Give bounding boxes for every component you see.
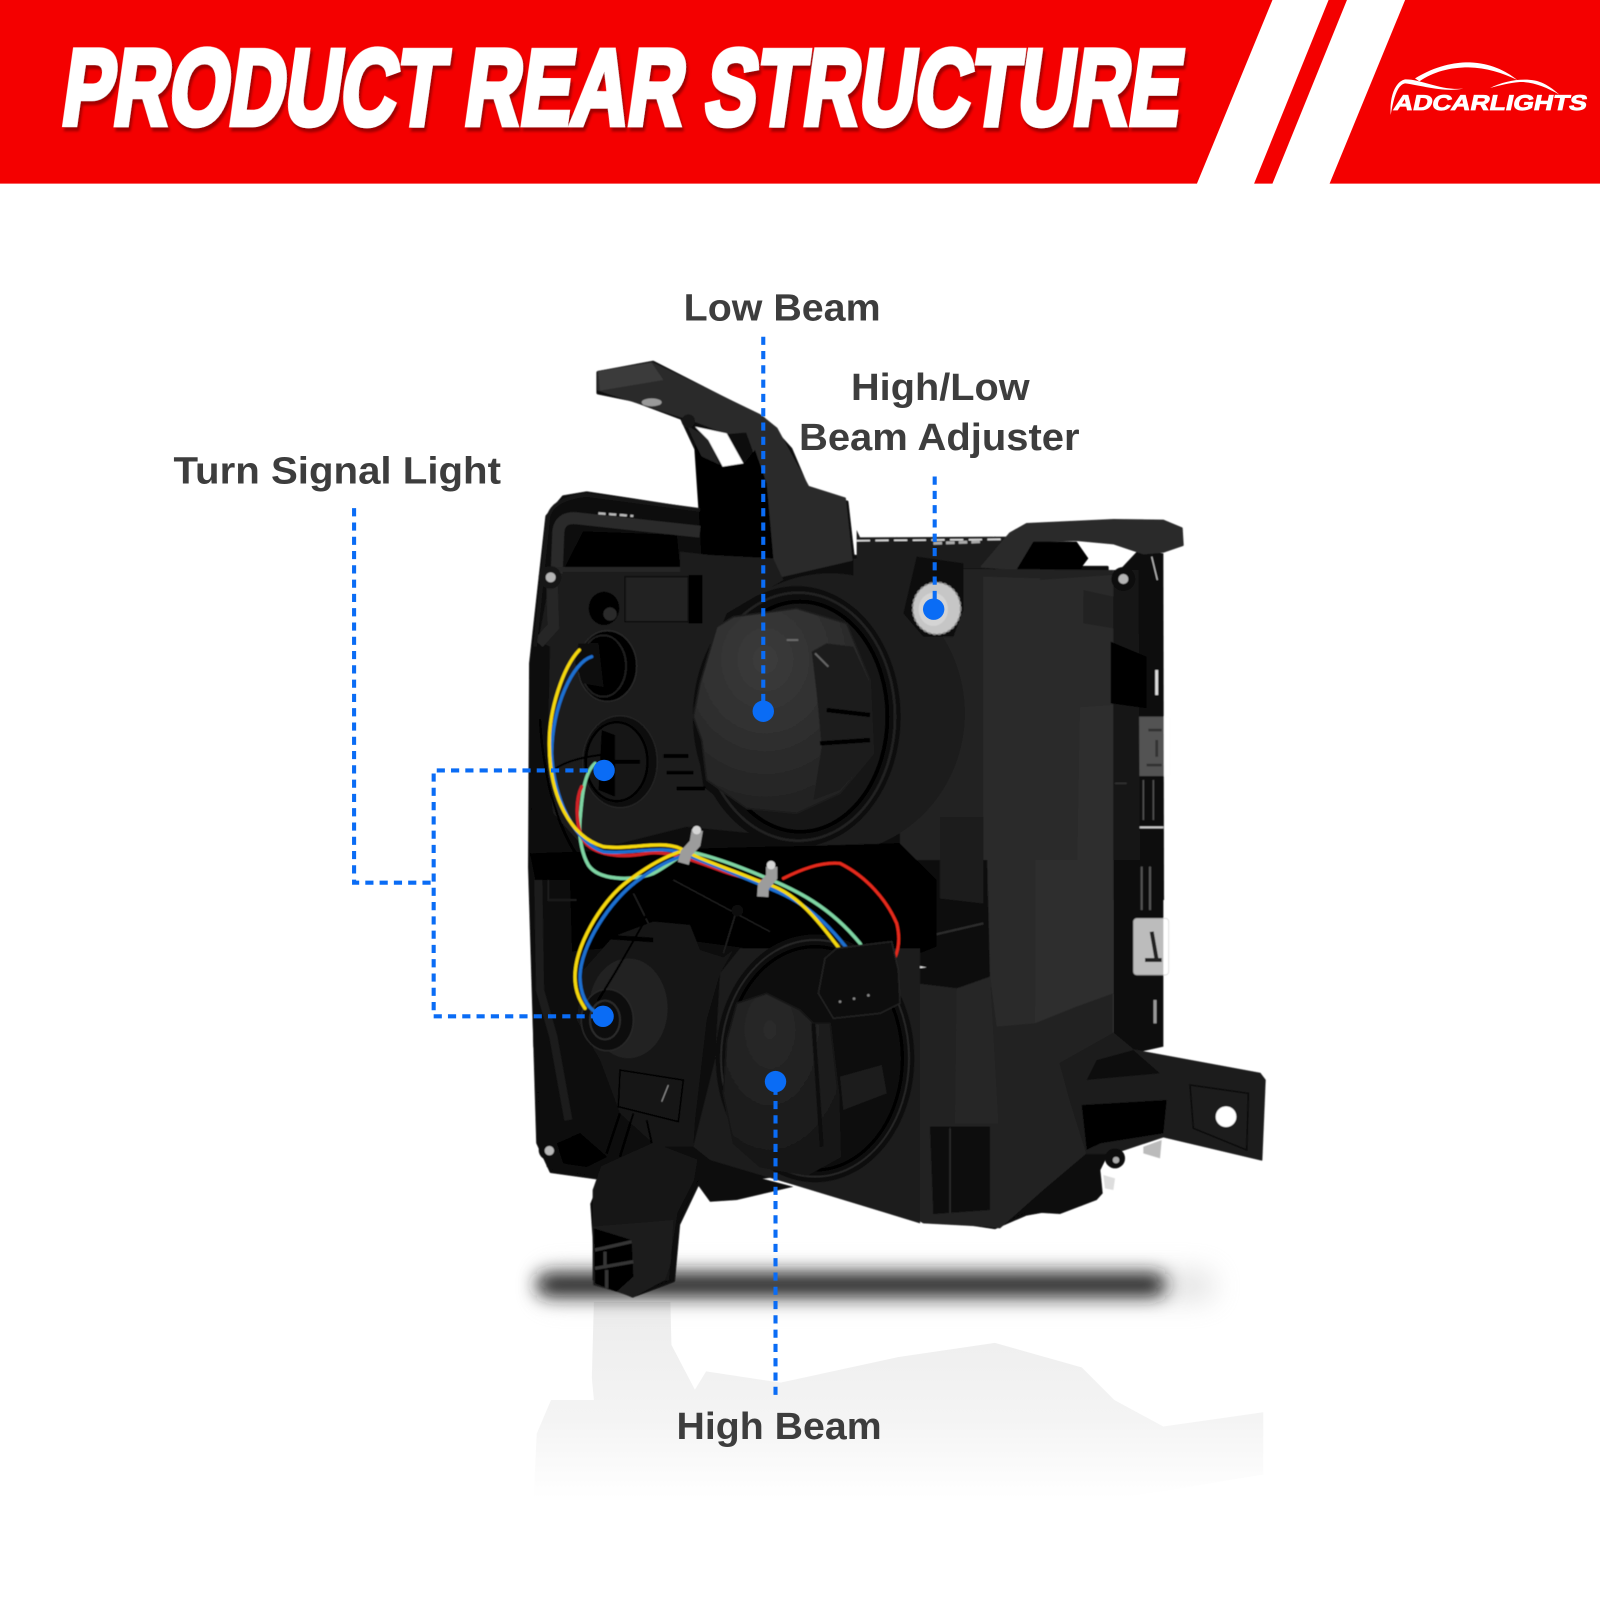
- connector tab: [593, 1143, 697, 1280]
- body under high beam: [693, 948, 920, 1223]
- callout: Low Beam: [684, 286, 881, 722]
- upper left section: plate, sockets and low beam cap: [530, 495, 965, 880]
- lens lower: [1113, 860, 1169, 1053]
- lower turn signal bulb: [581, 958, 668, 1058]
- lower right section: block, recess and tab: [857, 860, 1265, 1228]
- lower plate: [577, 922, 733, 1147]
- callout: High/Low Beam Adjuster: High/Low: [851, 366, 1030, 408]
- rear block: [900, 568, 1147, 900]
- upper left screw: [539, 566, 561, 589]
- floor shadow: [537, 1270, 1214, 1301]
- lower left section: bay, plate, bulb and high beam cap: [530, 843, 937, 1280]
- header banner: [0, 0, 1600, 184]
- cover plate and hole: [589, 575, 702, 625]
- lower left screw: [539, 1140, 559, 1160]
- flap: [557, 1070, 683, 1167]
- logo: Adcarlights: [1391, 62, 1590, 115]
- lens strip: [1113, 550, 1170, 900]
- right mounting tab: [1060, 1033, 1265, 1160]
- lower right screw: [1103, 1140, 1162, 1190]
- callout: Low Beam: Low Beam: [684, 286, 881, 328]
- callout: Turn Signal Light: Turn Signal Light: [173, 450, 501, 492]
- upper turn signal socket: [575, 631, 637, 701]
- upper right screw: [1111, 567, 1135, 591]
- wiring connector plug: [818, 942, 900, 1018]
- top right section: ear, lens and rear block: [857, 520, 1183, 900]
- wire clips: [683, 826, 775, 897]
- callout: High/Low Beam Adjuster: Beam Adjuster: [799, 416, 1080, 458]
- callout: Turn Signal Light: [173, 450, 615, 1027]
- high beam dust cap: [723, 993, 887, 1175]
- left rib: [530, 880, 577, 1173]
- body behind cap: [695, 558, 965, 853]
- ground reflection: [534, 1302, 1263, 1498]
- adjuster backing: [903, 557, 963, 637]
- title: PRODUCT REAR STRUCTURE: [56, 28, 1191, 147]
- low beam seal rings: [693, 586, 901, 847]
- left plate: [530, 552, 783, 880]
- headlight rear view: [530, 362, 1265, 1297]
- rounded frame tube: [535, 495, 700, 647]
- lower block: [857, 860, 1113, 1228]
- high beam seal rings: [716, 934, 914, 1182]
- black wire bay: [530, 843, 937, 967]
- callout: High Beam: [677, 1071, 882, 1447]
- low beam dust cap: [693, 608, 873, 813]
- logo: Adcarlights: ADCARLIGHTS: [1392, 90, 1590, 115]
- ear arm: [982, 520, 1183, 569]
- callout: High Beam: High Beam: [677, 1405, 882, 1447]
- wiring harness: [540, 650, 899, 1012]
- top mounting bracket: [598, 363, 852, 577]
- body silhouette: [530, 362, 1107, 1296]
- lower turn signal socket: [583, 716, 705, 808]
- chrome rim strip: [857, 530, 1010, 568]
- adjuster knob: [913, 582, 961, 634]
- connector bottom end: [593, 1220, 673, 1297]
- callout: High/Low Beam Adjuster: [799, 366, 1080, 620]
